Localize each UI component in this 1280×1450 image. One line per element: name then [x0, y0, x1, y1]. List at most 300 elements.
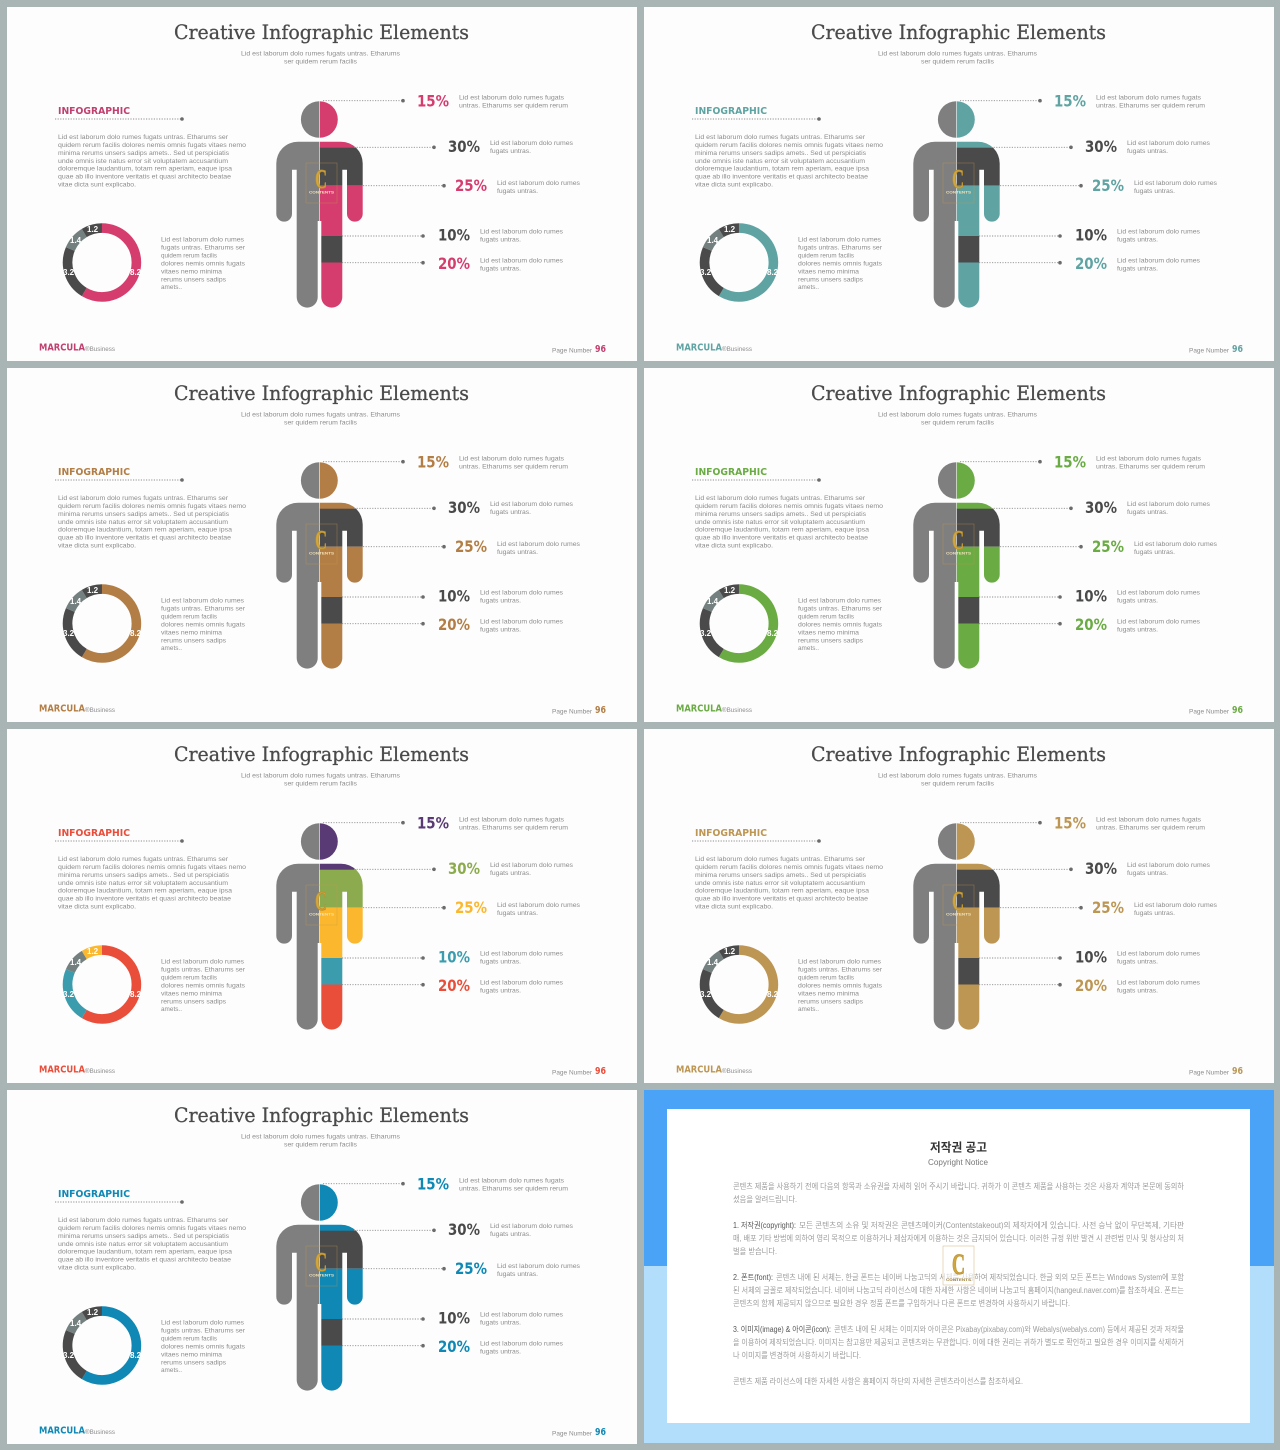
callout: 20%: fugats untras.	[1117, 626, 1158, 634]
title: Creative Infographic Elements	[174, 1103, 469, 1127]
footer: brand	[39, 1426, 116, 1436]
subtitle	[878, 772, 1038, 788]
text block: donut note: dolores nemis omnis fugats	[161, 260, 246, 267]
callout: 10%: Lid est laborum dolo rumes	[1117, 950, 1201, 958]
callout: 25%: fugats untras.	[497, 910, 538, 917]
human figure	[913, 461, 1001, 670]
callout: 10%: 10%	[1075, 226, 1107, 244]
text block: description: doloremque laudantium, totam rem aperiam, eaque ipsa	[58, 1248, 232, 1256]
text block: donut note: rerums unsers sadips	[798, 998, 864, 1005]
callout: 30%: Lid est laborum dolo rumes	[1127, 140, 1211, 147]
footer: page number: Page Number	[1189, 348, 1230, 354]
callout: 30%	[991, 859, 1211, 878]
text block: description: quae ab illo inventore veritatis et quasi architecto beatae	[695, 174, 868, 180]
text block: description: unde omnis iste natus error sit voluptatem accusantium	[58, 158, 229, 165]
text block: donut note: rerums unsers sadips	[798, 276, 864, 283]
text block: donut note: amets..	[161, 1367, 182, 1374]
callout: 25%	[363, 537, 581, 556]
footer: page number: 96	[1232, 344, 1243, 355]
text block: description: Lid est laborum dolo rumes fugats untras. Etharums ser	[58, 134, 229, 141]
text block: description: minima rerums unsers sadips amets.. Sed ut perspiciatis	[695, 511, 867, 518]
callout: 30%: fugats untras.	[490, 509, 531, 516]
callout: 15%	[960, 92, 1206, 110]
text block: description	[58, 1217, 246, 1272]
text block: font clause: 2. 폰트(font):	[733, 1273, 773, 1282]
human figure	[276, 822, 364, 1030]
callout: 15%: untras. Etharums ser quidem rerum	[459, 1186, 569, 1192]
callout: 25%: 25%	[1092, 898, 1124, 917]
footer: brand: MARCULA	[39, 1064, 86, 1076]
text block: description: doloremque laudantium, totam rem aperiam, eaque ipsa	[695, 166, 869, 172]
text block: description: doloremque laudantium, totam rem aperiam, eaque ipsa	[695, 526, 869, 534]
callout: 20%: 20%	[438, 615, 470, 634]
text block: donut note: Lid est laborum dolo rumes	[798, 598, 882, 604]
panel: tan infographic slide	[644, 729, 1274, 1083]
subtitle: Lid est laborum dolo rumes fugats untras. Etharums	[241, 412, 401, 418]
human figure	[276, 1183, 364, 1392]
callout: 20%: 20%	[1075, 976, 1107, 995]
panel: blue infographic slide	[7, 1090, 637, 1444]
logo: contents watermark: CONTENTS	[946, 1277, 971, 1282]
footer: brand: MARCULA	[39, 342, 86, 354]
callout: 10%: Lid est laborum dolo rumes	[1117, 590, 1201, 596]
donut chart: 1.4	[70, 236, 82, 245]
subtitle	[241, 772, 401, 788]
callout: 10%	[979, 948, 1201, 966]
text block: donut note: rerums unsers sadips	[798, 637, 864, 644]
callout: 15%: 15%	[417, 814, 449, 832]
callout: 25%: Lid est laborum dolo rumes	[497, 1263, 581, 1270]
text block: image clause	[733, 1324, 1184, 1360]
text block: donut note: quidem rerum facilis	[798, 974, 855, 982]
callout: 15%: 15%	[1054, 92, 1086, 110]
subtitle: ser quidem rerum facilis	[921, 420, 995, 426]
human figure: C	[952, 164, 964, 194]
callout: 10%	[342, 226, 564, 244]
callout: 15%: 15%	[417, 452, 449, 472]
subtitle	[241, 1134, 401, 1148]
callout: 15%: untras. Etharums ser quidem rerum	[459, 824, 569, 832]
callout: 30%	[354, 498, 574, 517]
footer: brand: MARCULA	[676, 342, 723, 354]
text block: description	[58, 495, 246, 550]
callout: 25%: Lid est laborum dolo rumes	[497, 902, 581, 909]
human figure: C	[315, 1247, 327, 1277]
callout: 30%: fugats untras.	[490, 1231, 531, 1238]
callout: 10%: 10%	[438, 586, 470, 606]
text block: donut note: fugats untras. Etharums ser	[798, 606, 883, 612]
text block: description: unde omnis iste natus error sit voluptatem accusantium	[695, 158, 866, 165]
donut chart: 1.2	[87, 586, 99, 595]
footer: brand	[39, 1064, 116, 1076]
heading: infographic	[55, 106, 184, 121]
text block: description: vitae dicta sunt explicabo.	[58, 542, 136, 550]
text block: donut note: quidem rerum facilis	[161, 614, 218, 620]
donut chart: 3.2	[63, 1351, 75, 1360]
text block: copyright clause: 1. 저작권(copyright):	[733, 1220, 796, 1230]
heading: infographic	[692, 467, 821, 482]
text block: description: quae ab illo inventore veritatis et quasi architecto beatae	[695, 534, 868, 542]
donut chart: 1.4	[707, 236, 719, 245]
footer: brand: MARCULA	[39, 1426, 86, 1436]
text block: donut note: quidem rerum facilis	[798, 252, 855, 260]
human figure: CONTENTS	[946, 190, 971, 194]
footer: page number: 96	[1232, 1066, 1243, 1077]
text block: description	[695, 495, 883, 550]
text block: donut note: rerums unsers sadips	[161, 276, 227, 283]
callout: 25%	[363, 176, 581, 195]
callout: 20%: fugats untras.	[480, 266, 521, 272]
text block: description: unde omnis iste natus error sit voluptatem accusantium	[695, 880, 866, 887]
callout: 20%	[342, 615, 564, 634]
callout: 30%: fugats untras.	[1127, 509, 1168, 516]
callout: 10%: fugats untras.	[1117, 236, 1158, 244]
human figure: C	[952, 525, 964, 555]
donut chart: 8.2	[130, 629, 142, 638]
callout: 10%	[979, 586, 1201, 606]
text block: donut note: dolores nemis omnis fugats	[161, 621, 246, 628]
heading: infographic: INFOGRAPHIC	[58, 106, 130, 117]
text block: donut note	[161, 1320, 246, 1374]
text block: license note: 콘텐츠 제품 라이선스에 대한 자세한 사항은 홈페이지 하단의 자세한 콘텐츠라이선스를 참조하세요.	[733, 1376, 1023, 1386]
text block: donut note: vitaes nemo minima	[798, 990, 859, 997]
text block: description: quae ab illo inventore veritatis et quasi architecto beatae	[695, 896, 868, 902]
callout: 25%: Lid est laborum dolo rumes	[1134, 180, 1218, 187]
footer: brand: MARCULA	[676, 704, 723, 714]
text block: description: doloremque laudantium, totam rem aperiam, eaque ipsa	[58, 888, 232, 894]
callout: 25%: Lid est laborum dolo rumes	[1134, 541, 1218, 548]
callout: 20%: fugats untras.	[1117, 266, 1158, 272]
callout: 10%: fugats untras.	[480, 958, 521, 966]
callout: 30%: fugats untras.	[490, 870, 531, 877]
callout: 25%: fugats untras.	[497, 1271, 538, 1278]
text block: description: quidem rerum facilis dolores nemis omnis fugats vitaes nemo	[58, 1225, 246, 1232]
callout: 15%	[960, 452, 1206, 472]
callout: 15%: untras. Etharums ser quidem rerum	[459, 464, 569, 470]
text block: description: minima rerums unsers sadips amets.. Sed ut perspiciatis	[58, 511, 230, 518]
text block: font clause	[733, 1272, 1185, 1308]
callout: 10%	[342, 948, 564, 966]
footer: page number: Page Number	[1189, 708, 1230, 716]
callout: 25%	[1000, 537, 1218, 556]
panel: brown infographic slide	[7, 368, 637, 722]
callout: 25%	[363, 898, 581, 917]
footer: page number	[1189, 1066, 1243, 1077]
text block: description: quidem rerum facilis dolores nemis omnis fugats vitaes nemo	[58, 864, 246, 871]
footer: page number: 96	[595, 705, 606, 716]
callout: 10%: Lid est laborum dolo rumes	[480, 228, 564, 236]
text block: donut note: fugats untras. Etharums ser	[798, 966, 883, 974]
callout: 15%	[323, 452, 569, 472]
text block: introduction: 콘텐츠 제품을 사용하기 전에 다음의 항목과 소유권을 자세히 읽어 주시기 바랍니다. 귀하가 이 콘텐츠 제품을 사용하는 것은 사용자 계약과 본문에 동의하	[733, 1181, 1185, 1191]
callout: 10%: 10%	[1075, 948, 1107, 966]
subtitle: Lid est laborum dolo rumes fugats untras. Etharums	[241, 50, 401, 58]
footer: page number: 96	[595, 1066, 606, 1077]
text block: donut note	[798, 958, 883, 1013]
human figure: CONTENTS	[309, 190, 334, 194]
footer: page number	[1189, 344, 1243, 355]
text block: donut note: vitaes nemo minima	[161, 1351, 222, 1358]
callout: 25%: 25%	[455, 1259, 487, 1278]
donut chart: 8.2	[130, 990, 142, 999]
callout: 20%: Lid est laborum dolo rumes	[480, 1340, 564, 1348]
donut chart: 3.2	[63, 629, 75, 638]
text block: description: minima rerums unsers sadips amets.. Sed ut perspiciatis	[58, 1233, 230, 1240]
human figure	[276, 100, 364, 308]
text block: donut note: amets..	[798, 645, 819, 652]
text block: description: Lid est laborum dolo rumes fugats untras. Etharums ser	[58, 495, 229, 502]
footer: page number	[552, 344, 606, 355]
footer: page number: Page Number	[552, 708, 593, 716]
text block: description: vitae dicta sunt explicabo.	[695, 542, 773, 550]
donut chart	[55, 937, 149, 1032]
text block: donut note: vitaes nemo minima	[161, 268, 222, 275]
logo: contents watermark: C	[952, 1248, 965, 1281]
text block: image clause: 콘텐츠 내에 된 서체는 이미지와 아이콘은 Pixabay(pixabay.com)와 Webalys(webalys.com) 등에서 제공된 것과 저작물	[834, 1324, 1184, 1334]
footer: brand	[676, 342, 753, 354]
callout: 30%: 30%	[1085, 137, 1117, 156]
donut chart	[692, 937, 786, 1032]
callout: 10%: 10%	[1075, 586, 1107, 606]
text block: donut note	[798, 598, 883, 652]
text block: donut note	[161, 598, 246, 652]
heading: infographic: INFOGRAPHIC	[58, 1189, 130, 1200]
subtitle: Lid est laborum dolo rumes fugats untras. Etharums	[878, 50, 1038, 58]
text block: description: quidem rerum facilis dolores nemis omnis fugats vitaes nemo	[695, 864, 883, 871]
callout: 15%: Lid est laborum dolo rumes fugats	[459, 94, 565, 102]
callout: 30%: Lid est laborum dolo rumes	[490, 1223, 574, 1230]
callout: 15%: untras. Etharums ser quidem rerum	[1096, 824, 1206, 832]
heading: infographic: INFOGRAPHIC	[695, 467, 767, 478]
donut chart: 1.2	[724, 947, 736, 956]
text block: donut note: fugats untras. Etharums ser	[161, 1328, 246, 1334]
human figure	[913, 100, 1001, 308]
text block: description: doloremque laudantium, totam rem aperiam, eaque ipsa	[58, 526, 232, 534]
text block: description: vitae dicta sunt explicabo.	[58, 182, 136, 188]
footer: page number: 96	[595, 344, 606, 355]
human figure: CONTENTS	[946, 912, 971, 916]
human figure: CONTENTS	[309, 550, 334, 556]
subtitle	[878, 50, 1038, 66]
text block: donut note: amets..	[161, 645, 182, 652]
footer: page number	[552, 1066, 606, 1077]
text block: description: unde omnis iste natus error sit voluptatem accusantium	[695, 519, 866, 526]
callout: 30%: fugats untras.	[1127, 870, 1168, 877]
text block: font clause: 된 서체의 글꼴로 제작되었습니다. 네이버 나눔고딕 라이선스에 대한 자세한 사항은 네이버 나눔고딕 홈페이지(hangeul.naver.com)를 참조하세요. 폰트는	[733, 1285, 1184, 1295]
subtitle	[878, 412, 1038, 426]
callout: 25%: 25%	[1092, 537, 1124, 556]
callout: 15%: Lid est laborum dolo rumes fugats	[459, 1178, 565, 1184]
human figure: CONTENTS	[309, 912, 334, 916]
callout: 20%: Lid est laborum dolo rumes	[480, 258, 564, 264]
callout: 20%	[342, 1337, 564, 1356]
text block: donut note: quidem rerum facilis	[161, 974, 218, 982]
text block: description: Lid est laborum dolo rumes fugats untras. Etharums ser	[695, 495, 866, 502]
callout: 20%: 20%	[438, 976, 470, 995]
callout: 30%: Lid est laborum dolo rumes	[1127, 862, 1211, 869]
callout: 25%: Lid est laborum dolo rumes	[497, 541, 581, 548]
text block: description: minima rerums unsers sadips amets.. Sed ut perspiciatis	[58, 872, 230, 879]
panel: copyright notice	[644, 1090, 1274, 1443]
callout: 25%: fugats untras.	[1134, 188, 1175, 195]
callout: 20%: Lid est laborum dolo rumes	[1117, 618, 1201, 626]
donut chart: 1.4	[70, 597, 82, 606]
footer: brand: ®Business	[722, 345, 753, 353]
donut chart: 3.2	[63, 990, 75, 999]
callout: 15%	[323, 92, 569, 110]
text block: description: minima rerums unsers sadips amets.. Sed ut perspiciatis	[695, 872, 867, 879]
text block: donut note: dolores nemis omnis fugats	[798, 260, 883, 267]
heading: infographic	[55, 467, 184, 482]
donut chart: 1.4	[707, 597, 719, 606]
text block: description: minima rerums unsers sadips amets.. Sed ut perspiciatis	[695, 150, 867, 157]
text block: image clause: 나 이미지를 변경하여 사용하시기 바랍니다.	[733, 1350, 861, 1360]
text block: description: vitae dicta sunt explicabo.	[695, 182, 773, 188]
footer: brand	[676, 704, 753, 714]
callout: 30%	[991, 498, 1211, 517]
callout: 20%: fugats untras.	[1117, 988, 1158, 994]
text block: copyright clause: 매, 배포 기타 방법에 의하여 영리 목적으로 이용하거나 제삼자에게 이용하는 것은 금지되어 있습니다. 이러한 규정 위반 발견 시 관련법 민사 및 형사상의 처	[733, 1233, 1184, 1243]
callout: 10%: fugats untras.	[480, 1320, 521, 1326]
callout: 10%	[342, 1308, 564, 1328]
callout: 20%	[979, 976, 1201, 995]
callout: 30%: 30%	[1085, 498, 1117, 517]
footer: page number: 96	[1232, 705, 1243, 716]
text block: donut note: Lid est laborum dolo rumes	[798, 236, 882, 244]
title: Creative Infographic Elements	[174, 20, 469, 44]
footer: brand: ®Business	[85, 345, 116, 353]
callout: 20%	[342, 976, 564, 995]
donut chart	[692, 215, 786, 310]
text block: description: quae ab illo inventore veritatis et quasi architecto beatae	[58, 1256, 231, 1264]
panel: multicolour infographic slide	[7, 729, 637, 1083]
callout: 15%: Lid est laborum dolo rumes fugats	[1096, 456, 1202, 462]
callout: 10%: 10%	[438, 226, 470, 244]
donut chart: 8.2	[130, 268, 142, 277]
callout: 20%: 20%	[438, 1337, 470, 1356]
callout: 10%: 10%	[438, 1308, 470, 1328]
callout: 15%: 15%	[1054, 452, 1086, 472]
text block: donut note: dolores nemis omnis fugats	[798, 621, 883, 628]
donut chart	[692, 576, 786, 671]
human figure: C	[952, 886, 964, 916]
text block: description	[58, 856, 246, 910]
text block: donut note: amets..	[161, 1006, 182, 1013]
heading: infographic: INFOGRAPHIC	[695, 828, 767, 839]
donut chart: 1.4	[707, 958, 719, 967]
text block: donut note: rerums unsers sadips	[161, 637, 227, 644]
subtitle: ser quidem rerum facilis	[284, 780, 358, 788]
text block: description: quae ab illo inventore veritatis et quasi architecto beatae	[58, 534, 231, 542]
donut chart: 3.2	[63, 268, 75, 277]
text block: description: Lid est laborum dolo rumes fugats untras. Etharums ser	[58, 856, 229, 863]
callout: 25%: fugats untras.	[1134, 549, 1175, 556]
text block: donut note: rerums unsers sadips	[161, 1359, 227, 1366]
callout: 20%: 20%	[438, 254, 470, 273]
callout: 25%: Lid est laborum dolo rumes	[1134, 902, 1218, 909]
text block: description: vitae dicta sunt explicabo.	[695, 904, 773, 910]
footer: page number: Page Number	[552, 1430, 593, 1438]
text block: description: vitae dicta sunt explicabo.	[58, 1264, 136, 1272]
text block: description: quidem rerum facilis dolores nemis omnis fugats vitaes nemo	[695, 142, 883, 149]
callout: 25%: fugats untras.	[497, 549, 538, 556]
subtitle: ser quidem rerum facilis	[284, 420, 358, 426]
text block: copyright clause	[733, 1220, 1185, 1256]
callout: 30%: 30%	[448, 859, 480, 878]
callout: 20%	[342, 254, 564, 273]
text block: description: quae ab illo inventore veritatis et quasi architecto beatae	[58, 174, 231, 180]
text block: donut note: quidem rerum facilis	[161, 1336, 218, 1342]
callout: 30%: 30%	[448, 137, 480, 156]
callout: 10%: Lid est laborum dolo rumes	[1117, 228, 1201, 236]
callout: 20%: 20%	[1075, 254, 1107, 273]
subtitle: Lid est laborum dolo rumes fugats untras. Etharums	[878, 412, 1038, 418]
footer: page number: Page Number	[1189, 1070, 1230, 1076]
callout: 15%: 15%	[417, 92, 449, 110]
title: Creative Infographic Elements	[174, 742, 469, 766]
text block: donut note: vitaes nemo minima	[161, 990, 222, 997]
donut chart: 1.2	[87, 947, 99, 956]
text block: description: doloremque laudantium, totam rem aperiam, eaque ipsa	[695, 888, 869, 894]
text block: image clause: 3. 이미지(image) & 아이콘(icon):	[733, 1324, 831, 1334]
donut chart: 1.4	[70, 958, 82, 967]
text block: description: quidem rerum facilis dolores nemis omnis fugats vitaes nemo	[695, 503, 883, 510]
donut chart	[55, 1298, 149, 1393]
panel: pink infographic slide	[7, 7, 637, 361]
title: Creative Infographic Elements	[811, 20, 1106, 44]
text block: donut note: Lid est laborum dolo rumes	[161, 958, 245, 966]
text block: description: quidem rerum facilis dolores nemis omnis fugats vitaes nemo	[58, 503, 246, 510]
callout: 30%: fugats untras.	[490, 148, 531, 155]
callout: 10%: fugats untras.	[480, 236, 521, 244]
subtitle: ser quidem rerum facilis	[284, 1142, 358, 1148]
heading: infographic	[692, 106, 821, 121]
callout: 10%	[979, 226, 1201, 244]
title: Creative Infographic Elements	[811, 381, 1106, 405]
text block: description: unde omnis iste natus error sit voluptatem accusantium	[58, 519, 229, 526]
subtitle: ser quidem rerum facilis	[284, 58, 358, 66]
heading: copyright notice: Copyright Notice	[928, 1158, 989, 1167]
callout: 10%: Lid est laborum dolo rumes	[480, 1312, 564, 1318]
callout: 15%: 15%	[417, 1174, 449, 1194]
callout: 30%: Lid est laborum dolo rumes	[1127, 501, 1211, 508]
title: Creative Infographic Elements	[811, 742, 1106, 766]
text block: description: minima rerums unsers sadips amets.. Sed ut perspiciatis	[58, 150, 230, 157]
text block: donut note: dolores nemis omnis fugats	[798, 982, 883, 989]
callout: 10%: fugats untras.	[1117, 958, 1158, 966]
text block: description: Lid est laborum dolo rumes fugats untras. Etharums ser	[58, 1217, 229, 1224]
heading: infographic: INFOGRAPHIC	[58, 828, 130, 839]
donut chart: 1.2	[724, 225, 736, 234]
callout: 25%: 25%	[1092, 176, 1124, 195]
text block: donut note: Lid est laborum dolo rumes	[161, 1320, 245, 1326]
callout: 25%: fugats untras.	[1134, 910, 1175, 917]
callout: 30%: 30%	[448, 498, 480, 517]
footer: brand: ®Business	[85, 706, 116, 714]
donut chart	[55, 576, 149, 671]
callout: 15%	[960, 814, 1206, 832]
donut chart: 1.2	[724, 586, 736, 595]
callout: 20%	[979, 254, 1201, 273]
callout: 10%: Lid est laborum dolo rumes	[480, 590, 564, 596]
text block: introduction: 셨음을 알려드립니다.	[733, 1194, 797, 1204]
donut chart: 3.2	[700, 990, 712, 999]
callout: 20%: 20%	[1075, 615, 1107, 634]
callout: 15%	[323, 814, 569, 832]
text block: donut note: Lid est laborum dolo rumes	[161, 598, 245, 604]
footer: brand	[676, 1064, 753, 1076]
callout: 30%	[354, 137, 574, 156]
